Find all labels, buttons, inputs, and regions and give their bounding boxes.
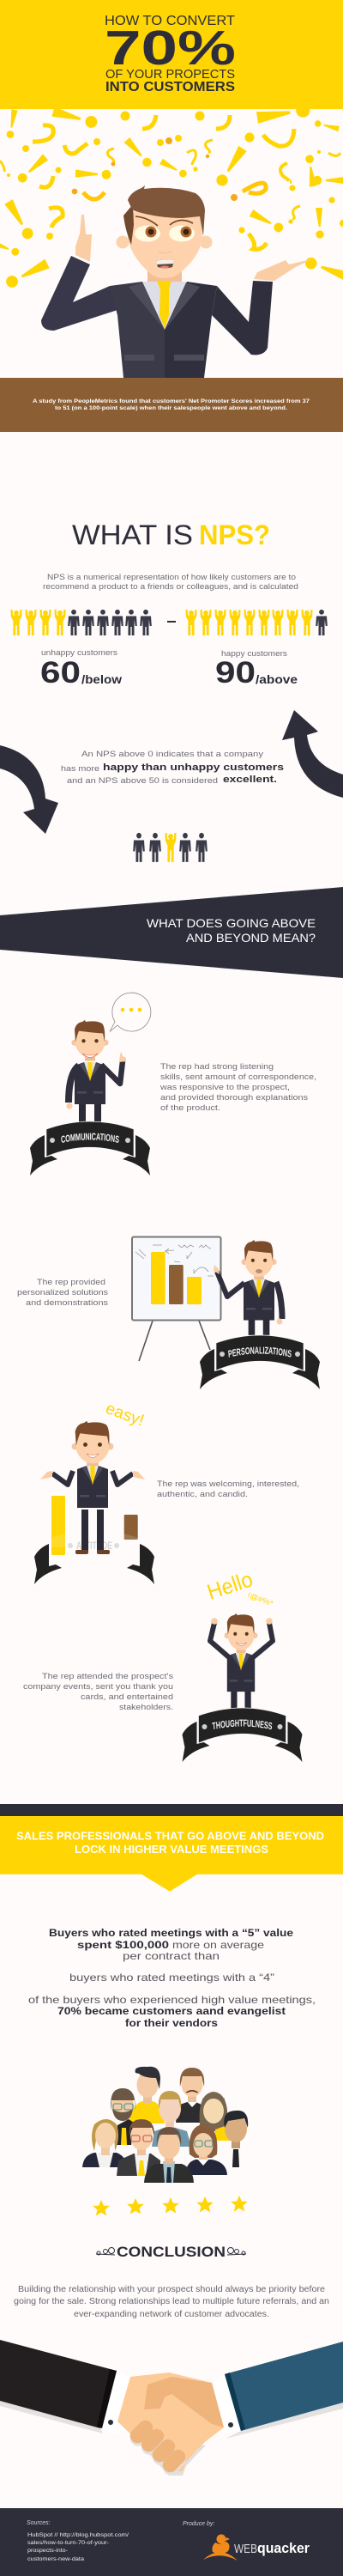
title number: 70%: 70%: [105, 21, 236, 76]
NPS definition: NPS is a numerical representation of how likely customers are to: [47, 573, 296, 582]
stat: happy customers 90: 90: [215, 656, 256, 690]
stat: happy customers 90: happy customers: [221, 649, 287, 659]
panel: study summary band: [0, 378, 343, 432]
ribbon: thoughtfulness: [182, 1707, 302, 1762]
statistic: 70 percent became customers: for their vendors: [125, 2017, 218, 2029]
logo: webquacker: [203, 2535, 310, 2561]
salesman cheering: [210, 1613, 273, 1709]
panel: thoughtfulness: [23, 1567, 302, 1762]
statistic: 70 percent became customers: of the buyers who experienced high value meetings,: [28, 1994, 316, 2006]
thoughtfulness description: The rep attended the prospect's: [42, 1672, 173, 1681]
presentation board chart: [132, 1236, 221, 1361]
statistic: $100,000 more: more on average: [172, 1939, 264, 1951]
thoughtfulness description: company events, sent you thank you: [23, 1682, 173, 1692]
statistic: 70 percent became customers: 70% became customers aand evangelist: [57, 2005, 286, 2017]
heading: WHAT IS: [72, 519, 193, 550]
conclusion text: [14, 2285, 329, 2319]
NPS definition: recommend a product to a friends or colleagues, and is calculated: [43, 582, 298, 592]
ribbon: thoughtfulness: THOUGHTFULNESS: [212, 1719, 273, 1729]
NPS explanation: An NPS above 0 indicates that a company: [81, 750, 263, 759]
panel: attitude: [34, 1400, 299, 1584]
salesman shrugging: [40, 1421, 145, 1554]
NPS explanation: has more: [61, 764, 99, 774]
title line: how to convert: HOW TO CONVERT: [105, 14, 235, 28]
left arm and raised finger: [41, 215, 120, 331]
banner heading: SALES PROFESSIONALS THAT GO ABOVE AND BEYOND: [16, 1831, 324, 1843]
statistic: $100,000 more: spent $100,000: [77, 1939, 169, 1951]
arrow: curved down: [0, 745, 58, 834]
scribble symbols: !@#%*: [246, 1590, 274, 1608]
ribbon: communications: [30, 1121, 150, 1176]
panel: conclusion: [0, 2244, 343, 2478]
ornament left: [96, 2248, 115, 2255]
stat: happy customers 90: /above: [256, 673, 298, 686]
attitude description: The rep was welcoming, interested,: [157, 1479, 299, 1489]
statistic: buyers rated 4: buyers who rated meetings with a “4”: [69, 1971, 274, 1984]
minus sign: [167, 621, 176, 623]
attitude description: [157, 1479, 299, 1499]
statistic: 70 percent became customers: [28, 1994, 316, 2029]
arrow: curved up: [282, 710, 343, 798]
NPS explanation: and an NPS above 50 is considered: [67, 776, 218, 786]
ornament right: [227, 2248, 246, 2255]
sources: sales/how-to-turn-70-of-your-: [27, 2540, 109, 2546]
heading: NPS?: [199, 519, 270, 550]
communications description: of the product.: [160, 1103, 220, 1113]
communications description: and provided thorough explanations: [160, 1093, 308, 1103]
illustration: group of customers: [82, 2067, 260, 2183]
pictogram: five people, one promoter: [133, 833, 208, 862]
stat: unhappy customers 60: [40, 648, 123, 690]
panel: hero with confused salesman: [0, 102, 343, 378]
pictogram: right group of customers: [185, 610, 328, 635]
NPS explanation: excellent.: [223, 775, 277, 785]
panel: study summary band: to 51 (on a 100-point scale) when their salespeople went above and beyond.: [55, 405, 287, 411]
communications description: skills, sent amount of correspondence,: [160, 1072, 316, 1082]
conclusion heading: CONCLUSION: [117, 2244, 226, 2260]
statistic: $100,000 more: per contract than: [123, 1950, 220, 1962]
right arm and open hand: [212, 259, 311, 355]
neck: [147, 271, 182, 283]
banner heading: [16, 1831, 324, 1856]
title line: of your propects: OF YOUR PROPECTS: [105, 67, 235, 82]
study text: A study from PeopleMetrics found that customers' Net Promoter Scores increased from 37: [33, 398, 310, 404]
producer credit: Produce by:: [183, 2521, 214, 2527]
conclusion text: Building the relationship with your prospect should always be priority before: [18, 2285, 325, 2294]
conclusion text: going for the sale. Strong relationships lead to multiple future referrals, and an: [14, 2297, 329, 2306]
stat: unhappy customers 60: /below: [81, 673, 123, 686]
handwritten word: easy: easy!: [103, 1400, 147, 1430]
conclusion text: ever-expanding network of customer advocates.: [74, 2310, 269, 2319]
band heading: AND BEYOND MEAN?: [186, 931, 316, 945]
pattern: question marks: [0, 115, 340, 249]
personalizations description: The rep provided: [37, 1278, 105, 1287]
statistic: $100,000 more: Buyers who rated meetings with a “5” value: [49, 1927, 293, 1939]
NPS explanation: happy than unhappy customers: [103, 762, 284, 773]
ribbon: personalizations: PERSONALIZATIONS: [228, 1346, 292, 1358]
pattern: exclamation marks: [0, 102, 343, 289]
heading: [72, 519, 270, 550]
personalizations description: and demonstrations: [26, 1298, 108, 1308]
title line: into customers: INTO CUSTOMERS: [105, 80, 235, 94]
band heading: [147, 916, 316, 945]
rating stars: [93, 2196, 248, 2215]
panel: going above and beyond heading band: [0, 887, 343, 978]
salesman presenting: [214, 1240, 283, 1335]
panel: what is NPS: [0, 519, 343, 862]
stat: unhappy customers 60: 60: [40, 656, 81, 690]
panel: personalizations: [17, 1236, 320, 1389]
back row: [129, 2067, 204, 2123]
panel: footer: [0, 2508, 343, 2576]
panel: meeting value statistics: [28, 1927, 316, 2183]
ribbon: communications: COMMUNICATIONS: [61, 1133, 119, 1143]
speech bubble: [110, 993, 151, 1032]
communications description: The rep had strong listening: [160, 1062, 274, 1072]
banner heading: LOCK IN HIGHER VALUE MEETINGS: [75, 1844, 268, 1856]
pictogram: left group of customers: [10, 610, 152, 635]
bars behind salesman: [51, 1496, 138, 1555]
handwritten word: hello: Hello: [204, 1567, 256, 1605]
front row: [82, 2119, 227, 2183]
salesman illustration: [41, 185, 311, 378]
panel: header: [0, 0, 343, 109]
sources: customers-new-data: [27, 2556, 84, 2562]
sources: Sources:: [27, 2520, 51, 2526]
thoughtfulness description: [23, 1672, 173, 1712]
head: [117, 185, 213, 278]
personalizations description: personalized solutions: [17, 1288, 108, 1297]
ribbon tails, faded attitude label: ATTITUDE: [76, 1541, 112, 1552]
ribbon tails, faded attitude label: [34, 1530, 154, 1584]
NPS definition: [43, 573, 298, 592]
salesman pointing up: [66, 1020, 126, 1122]
statistic: $100,000 more: [49, 1927, 293, 1962]
panel: higher value meetings banner: [0, 1804, 343, 1892]
communications description: was responsive to the prospect,: [159, 1083, 290, 1092]
pattern: dots: [7, 112, 343, 240]
panel: communications: [30, 993, 316, 1176]
sources: prospects-into-: [27, 2548, 68, 2554]
stat: unhappy customers 60: unhappy customers: [41, 648, 117, 658]
NPS explanation: [61, 750, 284, 786]
thoughtfulness description: cards, and entertained: [81, 1692, 173, 1702]
sources: HubSpot // http://blog.hubspot.com/: [27, 2532, 129, 2538]
logo: webquacker: WEB: [234, 2542, 257, 2556]
thoughtfulness description: stakeholders.: [119, 1703, 173, 1712]
attitude description: authentic, and candid.: [157, 1490, 248, 1499]
ribbon: personalizations: [200, 1334, 320, 1389]
sources: [27, 2520, 129, 2562]
middle row: [111, 2088, 260, 2167]
jacket: [110, 281, 217, 378]
logo: webquacker: quacker: [257, 2540, 310, 2556]
communications description: [159, 1062, 316, 1113]
band heading: WHAT DOES GOING ABOVE: [147, 916, 316, 930]
stat: happy customers 90: [215, 649, 298, 690]
personalizations description: [17, 1278, 108, 1308]
illustration: handshake: [0, 2340, 343, 2478]
